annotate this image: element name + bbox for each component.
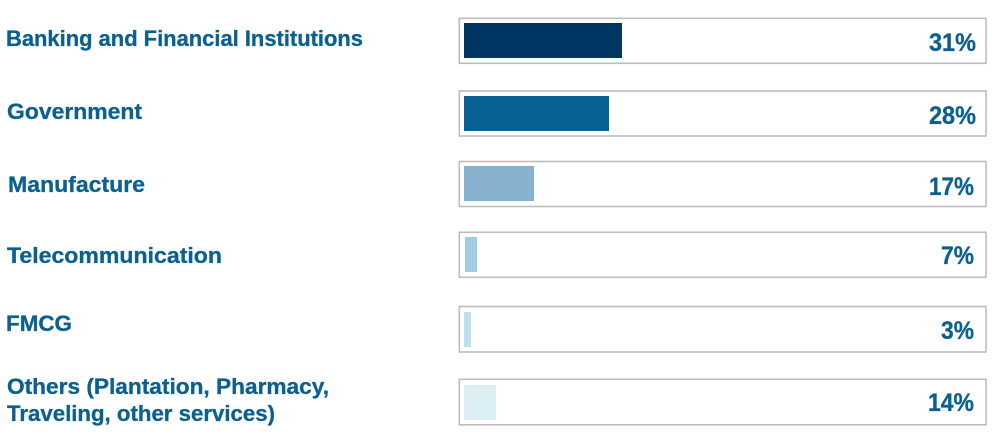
row: Banking and Financial Institutions xyxy=(6,18,986,63)
track xyxy=(459,232,986,277)
row: FMCG xyxy=(6,306,986,352)
bar xyxy=(464,312,471,347)
row: Telecommunication xyxy=(7,232,986,277)
bar xyxy=(464,23,622,58)
value: 17% xyxy=(929,173,974,201)
label: Government xyxy=(7,99,143,124)
row: Others xyxy=(7,374,986,426)
row: Government xyxy=(7,91,986,136)
track xyxy=(459,18,986,63)
label: Banking and Financial Institutions xyxy=(6,26,363,51)
value: 3% xyxy=(941,317,974,345)
label second line: Traveling, other services) xyxy=(7,401,275,426)
label: Manufacture xyxy=(8,172,145,197)
bar xyxy=(464,385,496,420)
label: Others (Plantation, Pharmacy, xyxy=(7,374,329,399)
track xyxy=(459,91,986,136)
track xyxy=(459,306,986,352)
bar xyxy=(464,166,534,201)
value: 28% xyxy=(929,102,976,130)
label: FMCG xyxy=(6,311,72,336)
label: Telecommunication xyxy=(7,243,222,268)
value: 7% xyxy=(941,242,974,270)
track xyxy=(459,162,986,206)
value: 31% xyxy=(929,29,976,57)
bar xyxy=(464,96,609,131)
row: Manufacture xyxy=(8,162,986,206)
bar xyxy=(465,237,477,272)
value: 14% xyxy=(928,389,974,417)
track xyxy=(459,379,986,425)
